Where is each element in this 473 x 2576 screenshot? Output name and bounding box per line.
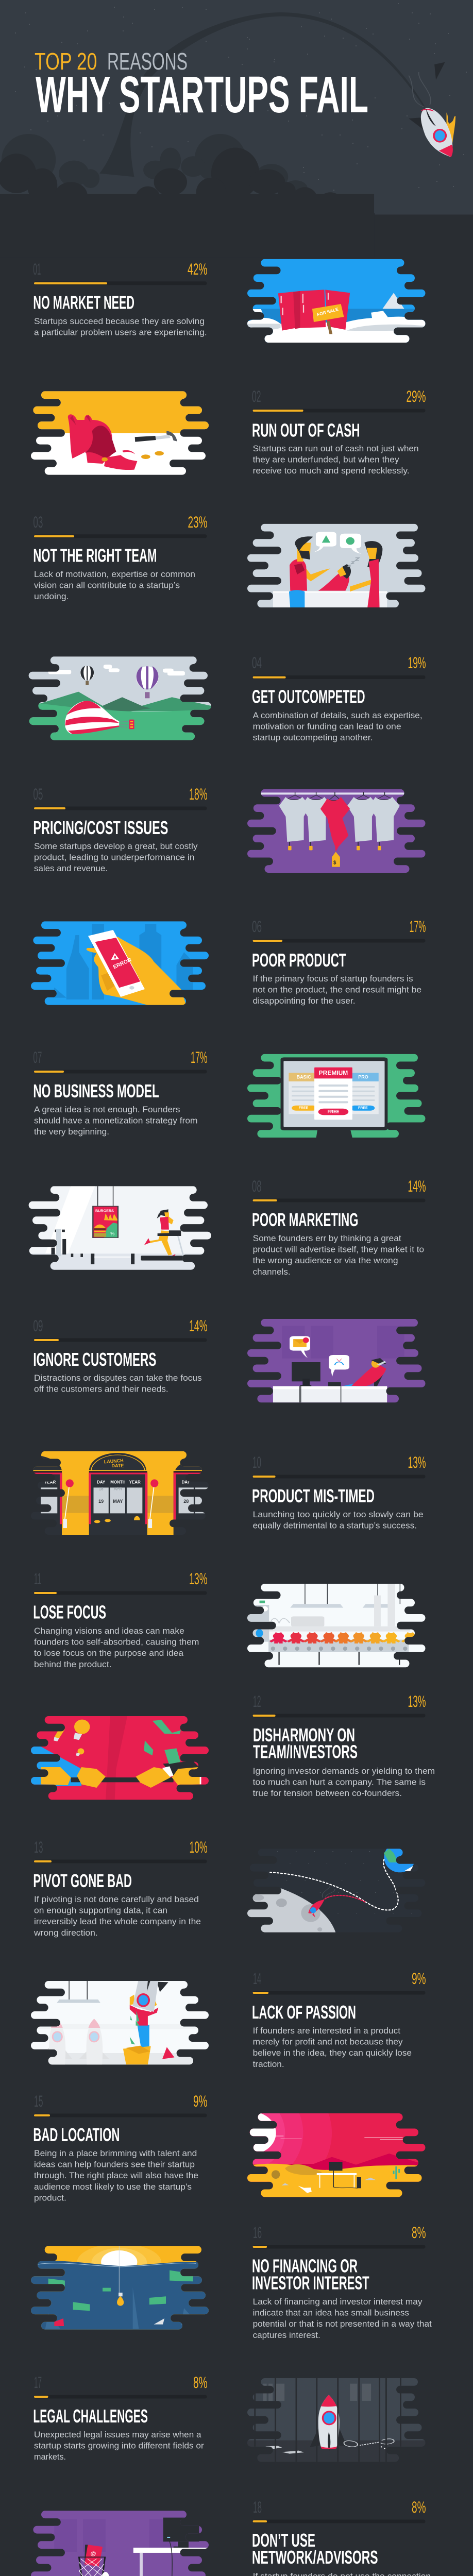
rank number: 08 bbox=[252, 1177, 262, 1195]
description: merely for profit and not because they bbox=[253, 2037, 403, 2047]
percentage: 10% bbox=[190, 1838, 207, 1856]
item 07: no business model: 07 bbox=[33, 1048, 42, 1066]
description: founders too self-absorbed, causing them bbox=[34, 1637, 199, 1647]
rank number: 06 bbox=[252, 917, 262, 936]
description: off the customers and their needs. bbox=[34, 1384, 168, 1394]
percentage: 13% bbox=[189, 1569, 207, 1588]
heading: LACK OF PASSION bbox=[252, 2002, 356, 2023]
percentage: 9% bbox=[412, 1969, 426, 1988]
description: disappointing for the user. bbox=[253, 996, 356, 1006]
illustration 17: rocket behind bars bbox=[247, 2378, 426, 2462]
header: night sky scene bbox=[0, 0, 473, 258]
illustration 06: phone showing error: ERROR bbox=[112, 957, 133, 970]
description bbox=[34, 2430, 204, 2462]
heading: LEGAL CHALLENGES bbox=[33, 2405, 148, 2427]
heading: NOT THE RIGHT TEAM bbox=[33, 545, 157, 566]
percentage: 13% bbox=[408, 1453, 426, 1471]
icon: crashing rocket bbox=[409, 62, 455, 157]
item 01: no market need: 01 bbox=[33, 260, 41, 278]
item 14: lack of passion bbox=[252, 1969, 426, 2069]
heading: NETWORK/ADVISORS bbox=[252, 2547, 378, 2568]
description: Lack of financing and investor interest may bbox=[253, 2297, 423, 2307]
percentage: 8% bbox=[193, 2373, 207, 2392]
illustration 10: launch date board: 18 bbox=[99, 1487, 104, 1492]
item 02: run out of cash bbox=[252, 387, 426, 476]
description: product will advertise itself, they market it to bbox=[253, 1245, 424, 1255]
illustration 09: founder ignoring notifications bbox=[247, 1319, 426, 1402]
description: through. The right place will also have the bbox=[34, 2171, 198, 2180]
item 02: run out of cash: 02 bbox=[252, 387, 261, 405]
heading: IGNORE CUSTOMERS bbox=[33, 1349, 156, 1370]
progress bar bbox=[253, 939, 426, 943]
illustration 10: launch date board: DAY bbox=[97, 1480, 106, 1484]
description: Some founders err by thinking a great bbox=[253, 1233, 401, 1243]
percentage: 29% bbox=[406, 387, 426, 405]
illustration 18: address book in the trash bbox=[27, 2509, 214, 2576]
description: channels. bbox=[253, 1267, 291, 1277]
header: rocket trail arc bbox=[99, 12, 427, 177]
percentage: 17% bbox=[409, 917, 426, 936]
item 12: disharmony on team/investors: 12 bbox=[253, 1692, 261, 1710]
heading: DISHARMONY ON bbox=[253, 1724, 355, 1745]
item 06: poor product bbox=[252, 917, 426, 1006]
progress bar bbox=[34, 1070, 207, 1074]
percentage: 9% bbox=[193, 2092, 207, 2110]
description: wrong direction. bbox=[33, 1928, 98, 1938]
description: a particular problem users are experiencing. bbox=[34, 328, 207, 337]
description: too much can hurt a company. The same is bbox=[253, 1777, 426, 1787]
item 18: don't use network/advisors bbox=[252, 2498, 431, 2576]
progress bar bbox=[253, 2519, 426, 2523]
progress bar bbox=[253, 1198, 426, 1202]
heading: DON’T USE bbox=[252, 2530, 315, 2551]
description: Startups can run out of cash not just when bbox=[253, 444, 419, 453]
heading: GET OUTCOMPETED bbox=[252, 686, 365, 707]
heading: PRODUCT MIS-TIMED bbox=[252, 1485, 375, 1506]
progress bar bbox=[34, 807, 207, 810]
description bbox=[33, 1894, 201, 1938]
description: If the primary focus of startup founders is bbox=[253, 974, 413, 984]
illustration 14: person lifting a rocket bbox=[27, 1979, 214, 2067]
item 12: disharmony on team/investors bbox=[253, 1692, 435, 1798]
item 07: no business model bbox=[33, 1048, 208, 1137]
illustration 03: team arguing over sleeper bbox=[247, 523, 426, 607]
progress bar bbox=[34, 1338, 207, 1342]
description bbox=[253, 2026, 412, 2069]
percentage: 23% bbox=[188, 513, 207, 531]
description: Launching too quickly or too slowly can be bbox=[253, 1510, 424, 1519]
progress bar bbox=[34, 1591, 207, 1595]
description: sales and revenue. bbox=[34, 863, 108, 873]
description: not on the product, the end result might be bbox=[253, 985, 421, 995]
percentage: 18% bbox=[189, 785, 207, 803]
illustration 07: pricing plans on screen: FREE bbox=[358, 1106, 368, 1110]
item 11: lose focus: 11 bbox=[34, 1569, 41, 1588]
illustration 02: broken piggy bank bbox=[27, 390, 214, 478]
illustration 07: pricing plans on screen: FREE bbox=[328, 1109, 340, 1114]
description: receive too much and spend recklessly. bbox=[253, 466, 410, 476]
heading: RUN OUT OF CASH bbox=[252, 419, 360, 441]
percentage: 14% bbox=[408, 1177, 426, 1195]
progress bar bbox=[253, 1991, 426, 1995]
heading bbox=[252, 2256, 369, 2293]
heading: LOSE FOCUS bbox=[33, 1601, 106, 1623]
description: Some startups develop a great, but costly bbox=[34, 841, 198, 851]
description: motivation or funding can lead to one bbox=[253, 722, 401, 732]
progress bar bbox=[253, 1714, 426, 1718]
illustration 08: runner on treadmill facing burger ad: % bbox=[110, 1231, 114, 1236]
description: potential or that is not presented in a way that bbox=[253, 2319, 432, 2329]
description: the wrong audience or via the wrong bbox=[253, 1256, 398, 1265]
description bbox=[34, 841, 198, 873]
description: A great idea is not enough. Founders bbox=[34, 1105, 180, 1114]
illustration 07: pricing plans on screen: PRO bbox=[358, 1075, 368, 1080]
description: captures interest. bbox=[253, 2330, 320, 2340]
progress bar bbox=[253, 1475, 426, 1479]
description bbox=[253, 1510, 424, 1531]
item 16: no financing or investor interest bbox=[252, 2223, 432, 2340]
description: they are underfunded, but when they bbox=[253, 455, 399, 465]
description: the very beginning. bbox=[34, 1127, 109, 1137]
progress bar bbox=[34, 281, 207, 285]
description: Startups succeed because they are solving bbox=[34, 316, 205, 326]
description: true for tension between co-founders. bbox=[253, 1788, 402, 1798]
illustration 10: launch date board: LAUNCH bbox=[104, 1458, 124, 1464]
item 16: no financing or investor interest: 16 bbox=[253, 2223, 262, 2242]
rank number: 09 bbox=[33, 1316, 43, 1335]
progress bar bbox=[34, 2113, 207, 2117]
heading bbox=[252, 2530, 378, 2568]
description bbox=[253, 444, 419, 476]
heading bbox=[253, 1724, 358, 1762]
illustration 07: pricing plans on screen: BASIC bbox=[297, 1075, 311, 1080]
illustration 05: shirts on a rail: $ bbox=[333, 860, 336, 866]
description bbox=[253, 974, 421, 1006]
illustration 10: launch date board: YEAR bbox=[129, 1480, 141, 1484]
item 01: no market need bbox=[33, 260, 208, 337]
illustration 10: launch date board: DATE bbox=[111, 1463, 124, 1468]
heading: NO MARKET NEED bbox=[33, 292, 134, 313]
progress bar bbox=[253, 675, 426, 679]
illustration 07: pricing plans on screen bbox=[247, 1054, 426, 1138]
rank number: 03 bbox=[33, 513, 43, 531]
description: Changing visions and ideas can make bbox=[34, 1626, 184, 1636]
description: markets. bbox=[34, 2452, 66, 2462]
percentage: 8% bbox=[412, 2498, 426, 2516]
description bbox=[34, 1105, 197, 1137]
title: top 20 reasons: REASONS bbox=[107, 48, 188, 75]
illustration 06: phone showing error bbox=[27, 920, 214, 1007]
description: equally detrimental to a startup’s success. bbox=[253, 1521, 417, 1531]
heading: NO BUSINESS MODEL bbox=[33, 1080, 159, 1101]
illustration 10: launch date board: 19 bbox=[98, 1499, 104, 1504]
rank number: 04 bbox=[252, 653, 262, 672]
description: vision can all contribute to a startup’s bbox=[34, 581, 180, 590]
progress bar bbox=[34, 534, 207, 538]
illustration 07: pricing plans on screen: PREMIUM bbox=[319, 1070, 348, 1077]
illustration 10: launch date board: APR bbox=[114, 1487, 122, 1492]
illustration 10: launch date board: YEAR bbox=[44, 1480, 56, 1484]
illustration 10: launch date board: DAY bbox=[182, 1480, 190, 1484]
illustration 01: for sale in the arctic: FOR SALE bbox=[316, 307, 339, 317]
description: to lose focus on the purpose and idea bbox=[34, 1648, 184, 1658]
illustration 08: runner on treadmill facing burger ad bbox=[27, 1185, 214, 1273]
description bbox=[34, 1626, 199, 1669]
description: startup outcompeting another. bbox=[253, 733, 373, 742]
item 17: legal challenges: 17 bbox=[34, 2373, 42, 2392]
item 18: don't use network/advisors: 18 bbox=[253, 2498, 262, 2516]
illustration 07: pricing plans on screen: FREE bbox=[299, 1106, 309, 1110]
star field bbox=[15, 4, 466, 190]
item 10: product mis-timed bbox=[252, 1453, 426, 1531]
heading: TEAM/INVESTORS bbox=[253, 1741, 358, 1762]
item 04: get outcompeted bbox=[252, 653, 426, 742]
description bbox=[253, 1766, 435, 1798]
progress bar bbox=[34, 1860, 207, 1863]
description bbox=[253, 1233, 424, 1277]
percentage: 42% bbox=[188, 260, 207, 278]
description: irreversibly lead the whole company in the bbox=[34, 1917, 201, 1926]
percentage: 8% bbox=[412, 2223, 426, 2242]
item 03: not the right team bbox=[33, 513, 208, 601]
description bbox=[34, 569, 195, 601]
description: If pivoting is not done carefully and based bbox=[34, 1894, 199, 1904]
heading: BAD LOCATION bbox=[33, 2124, 120, 2145]
illustration 10: launch date board: MONTH bbox=[110, 1480, 126, 1484]
percentage: 19% bbox=[408, 653, 426, 672]
description: Being in a place brimming with talent and bbox=[34, 2148, 197, 2158]
description: behind the product. bbox=[34, 1659, 112, 1669]
description: ideas can help founders see their startup bbox=[34, 2160, 195, 2170]
illustration 10: launch date board bbox=[33, 1451, 208, 1535]
heading: NO FINANCING OR bbox=[252, 2256, 358, 2277]
description: audience most likely to use the startup’s bbox=[34, 2182, 192, 2192]
item 15: bad location: 15 bbox=[34, 2092, 43, 2110]
item 05: pricing/cost issues bbox=[33, 785, 208, 873]
description: undoing. bbox=[34, 591, 69, 601]
description: Distractions or disputes can take the focus bbox=[34, 1373, 202, 1383]
illustration 10: launch date board: 28 bbox=[183, 1499, 189, 1504]
progress bar bbox=[34, 2395, 207, 2399]
description: traction. bbox=[253, 2059, 284, 2069]
description bbox=[34, 1373, 202, 1394]
progress bar bbox=[253, 409, 426, 412]
illustration 15: desk in the desert bbox=[247, 2113, 426, 2197]
description: product. bbox=[34, 2193, 66, 2202]
description bbox=[253, 710, 423, 742]
illustration 13: rocket crashed on the moon bbox=[247, 1849, 414, 1933]
title: top 20 reasons: TOP 20 bbox=[35, 48, 97, 75]
item 11: lose focus bbox=[33, 1569, 208, 1669]
description bbox=[253, 2297, 432, 2340]
illustration 18: address book in the trash: @ bbox=[91, 2551, 96, 2557]
item 14: lack of passion: 14 bbox=[253, 1969, 261, 1988]
percentage: 14% bbox=[189, 1316, 207, 1335]
description: believe in the idea, they can quickly lose bbox=[253, 2048, 412, 2058]
illustration 01: for sale in the arctic bbox=[247, 259, 426, 343]
percentage: 17% bbox=[191, 1048, 207, 1066]
description: indicate that an idea has small business bbox=[253, 2308, 409, 2318]
illustration 08: runner on treadmill facing burger ad: BURGERS bbox=[95, 1208, 114, 1213]
percentage: 13% bbox=[408, 1692, 426, 1710]
description: Ignoring investor demands or yielding to them bbox=[253, 1766, 435, 1776]
heading: POOR MARKETING bbox=[252, 1209, 359, 1230]
item 09: ignore customers bbox=[33, 1316, 208, 1394]
illustration 16: sunken lightbulb and money bbox=[27, 2244, 214, 2332]
description: product, leading to underperformance in bbox=[34, 853, 195, 862]
illustration 05: shirts on a rail bbox=[247, 789, 426, 873]
item 10: product mis-timed: 10 bbox=[252, 1453, 261, 1471]
item 13: pivot gone bad bbox=[33, 1838, 208, 1938]
heading: INVESTOR INTEREST bbox=[252, 2272, 369, 2293]
description: If founders are interested in a product bbox=[253, 2026, 400, 2036]
heading: PIVOT GONE BAD bbox=[33, 1870, 132, 1891]
description: should have a monetization strategy from bbox=[34, 1116, 197, 1126]
rank number: 05 bbox=[33, 785, 43, 803]
item 08: poor marketing bbox=[252, 1177, 426, 1277]
description: Lack of motivation, expertise or common bbox=[34, 569, 195, 579]
illustration 12: tug of war bbox=[27, 1715, 214, 1802]
description: startup starts growing into different fields or bbox=[34, 2441, 204, 2451]
item 17: legal challenges bbox=[33, 2373, 208, 2462]
description: Unexpected legal issues may arise when a bbox=[34, 2430, 201, 2439]
description bbox=[34, 316, 207, 337]
heading: PRICING/COST ISSUES bbox=[33, 817, 168, 838]
title: top 20 reasons bbox=[35, 48, 188, 75]
heading: POOR PRODUCT bbox=[252, 950, 346, 971]
progress bar bbox=[253, 2245, 426, 2248]
item 15: bad location bbox=[33, 2092, 208, 2202]
description: A combination of details, such as expertise, bbox=[253, 710, 423, 720]
header: smoke clouds bbox=[0, 134, 375, 258]
illustration 04: hot air balloons bbox=[27, 655, 214, 742]
illustration 11: teddy bear conveyor bbox=[247, 1584, 426, 1667]
description bbox=[34, 2148, 198, 2202]
description: on enough supporting data, it can bbox=[34, 1906, 167, 1916]
item 13: pivot gone bad: 13 bbox=[34, 1838, 43, 1856]
illustration 10: launch date board: MAY bbox=[113, 1499, 123, 1504]
